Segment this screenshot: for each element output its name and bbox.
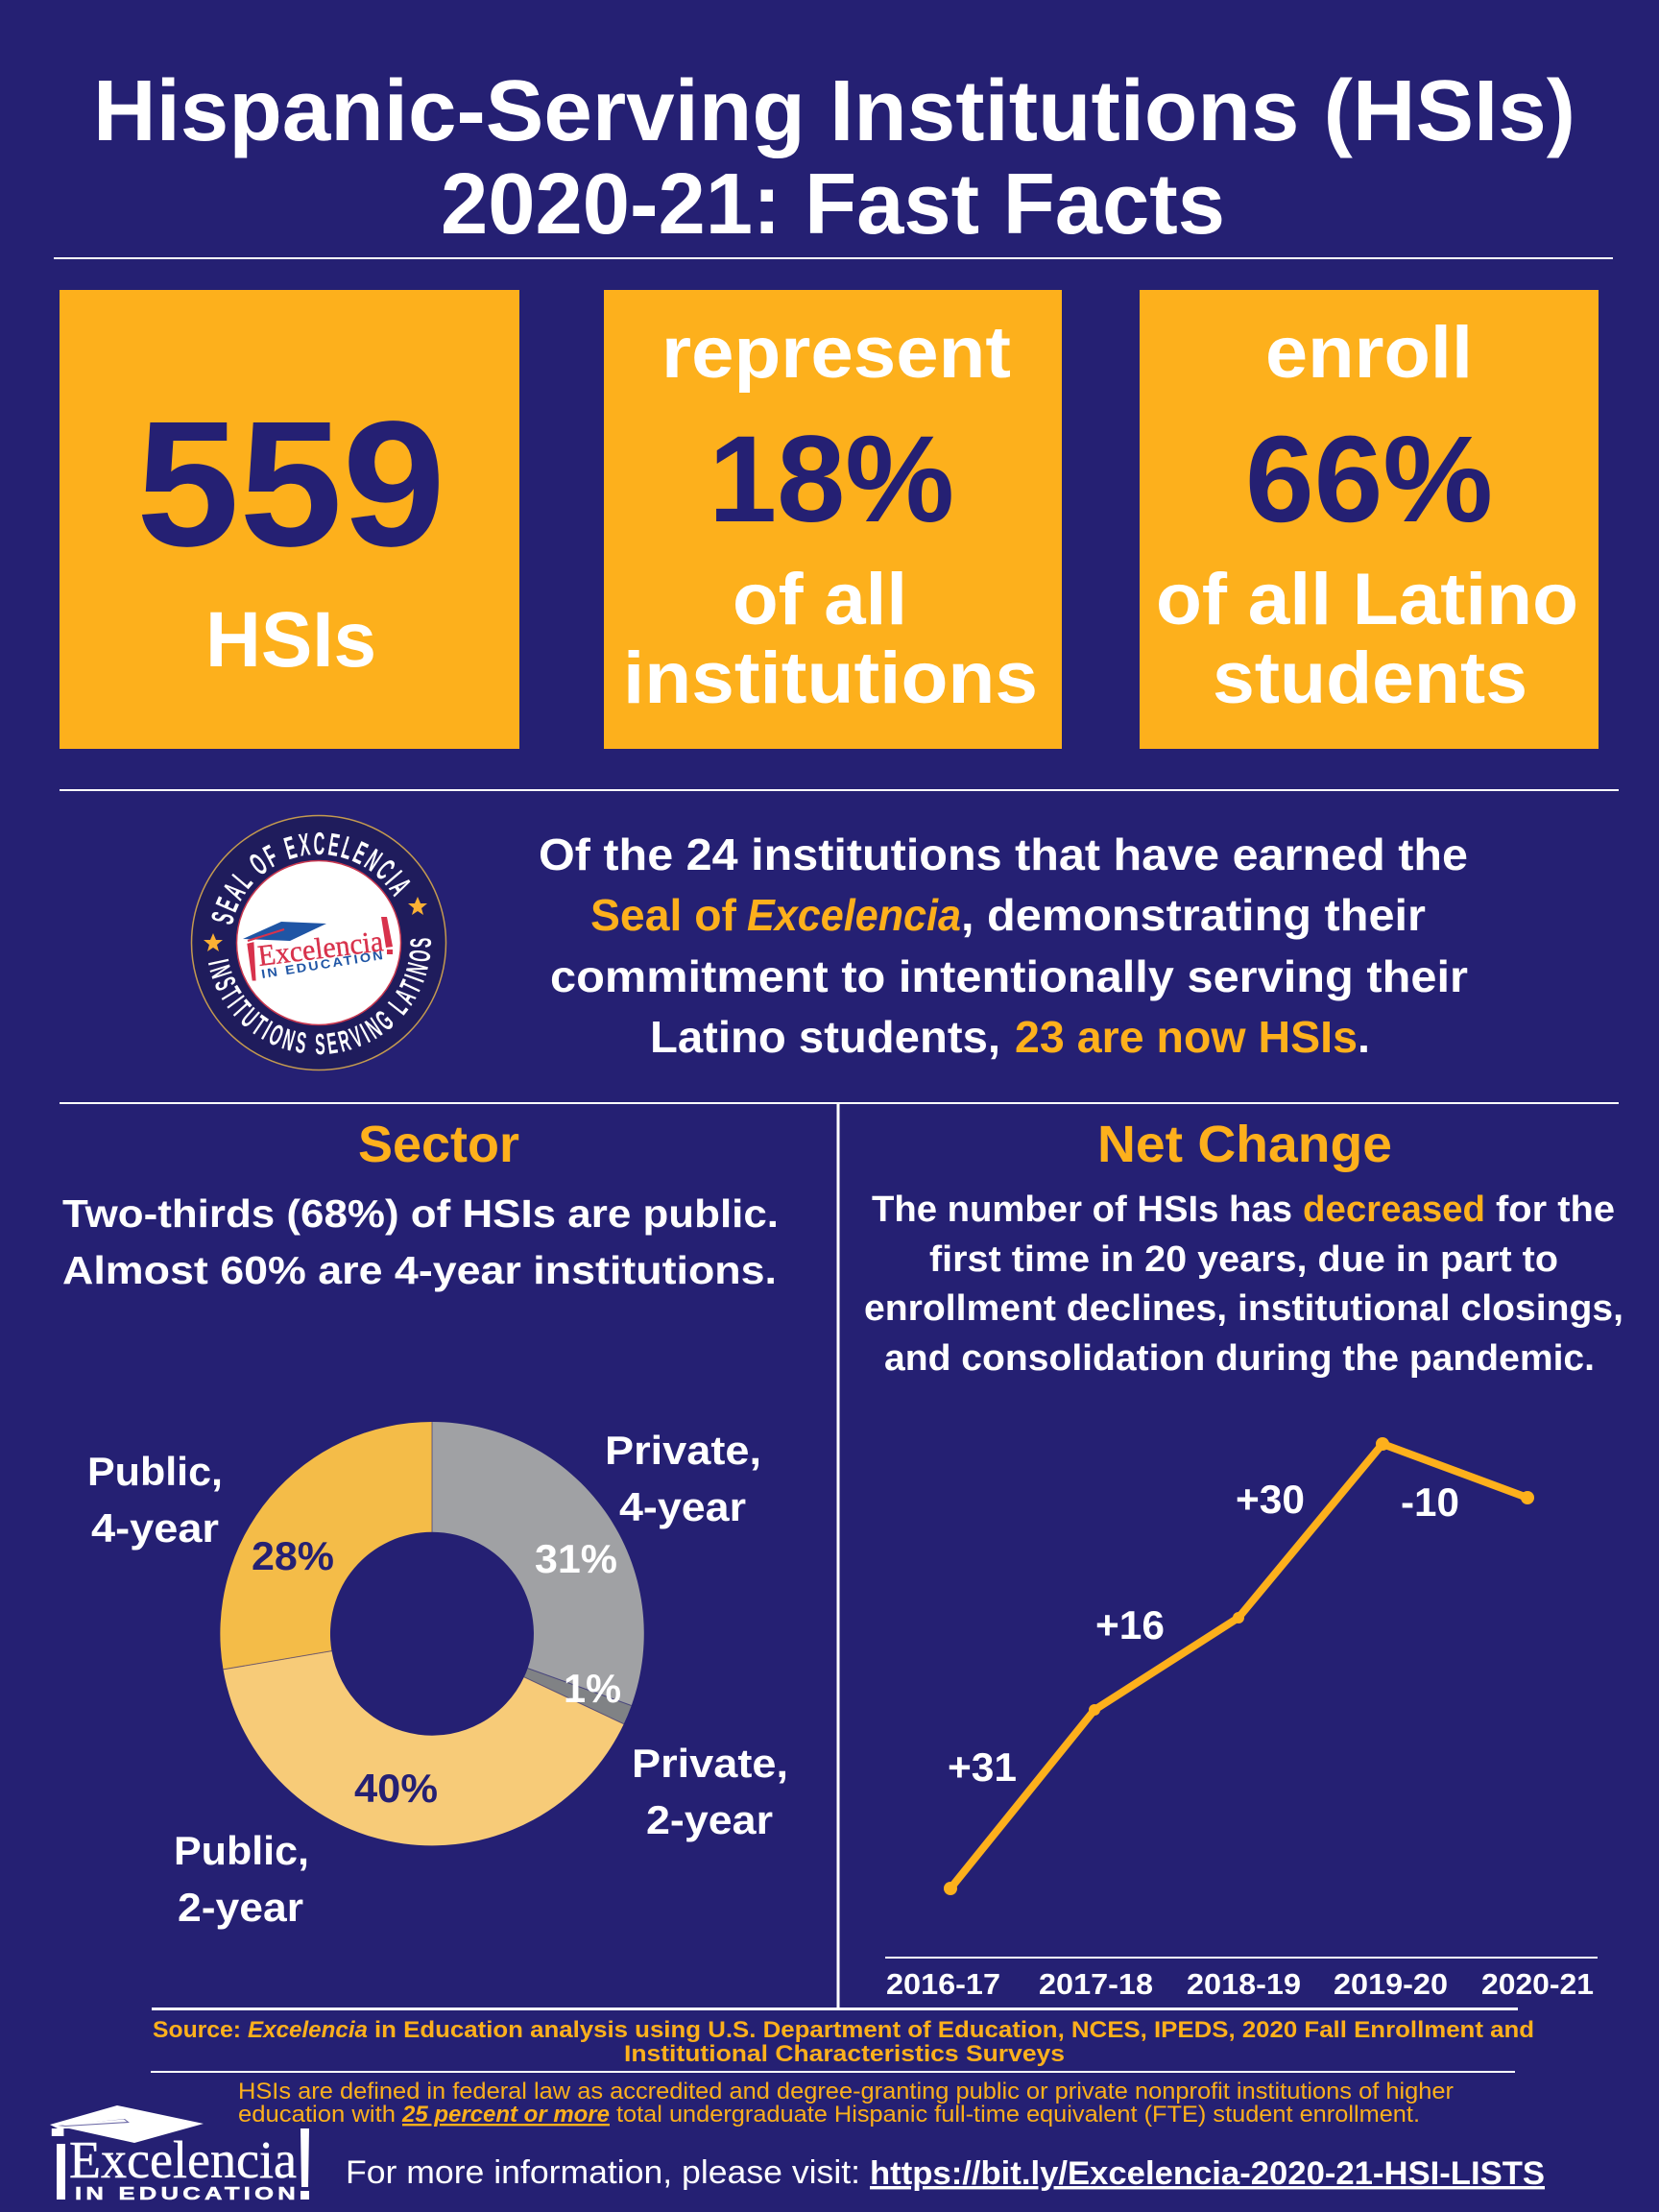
label: Private 2-year — [632, 1741, 788, 1842]
text block: net change summary: enrollment declines, institutional closings, — [864, 1288, 1623, 1329]
label: Private 4-year — [605, 1428, 761, 1529]
text block: sector summary: Two-thirds (68%) of HSIs are public. — [62, 1191, 779, 1236]
donut chart: sector shares: 40% — [354, 1766, 438, 1811]
text block: seal statement — [539, 830, 1468, 1062]
panel: enroll 66%: of all Latino — [1156, 559, 1578, 640]
text block: seal statement: 23 are now HSIs — [1015, 1012, 1358, 1062]
heading: Sector: Sector — [358, 1116, 519, 1173]
definition note — [238, 2079, 1454, 2128]
line chart: net change in HSIs: +16 — [1095, 1602, 1165, 1647]
label: Public 4-year: 4-year — [91, 1505, 219, 1551]
text block: seal statement: . — [1358, 1012, 1370, 1062]
line chart: net change in HSIs: 2018-19 — [1187, 1967, 1301, 2001]
line chart: net change in HSIs: 2016-17 — [886, 1967, 1000, 2001]
label: Public 4-year — [87, 1449, 223, 1551]
line chart: net change in HSIs: 2019-20 — [1334, 1967, 1448, 2001]
panel: enroll 66% — [1140, 290, 1599, 749]
text block: seal statement: Latino students, — [650, 1012, 1000, 1062]
text block: net change summary: The number of HSIs has — [872, 1190, 1292, 1230]
heading: Net Change: Net Change — [1097, 1116, 1392, 1173]
text block: seal statement: Of the 24 institutions that have earned the — [539, 830, 1468, 879]
label: Private 4-year: 4-year — [619, 1484, 746, 1529]
source note: Source: — [153, 2017, 241, 2043]
line chart: net change in HSIs: +31 — [948, 1744, 1017, 1790]
title: Hispanic-Serving Institutions (HSIs) — [93, 63, 1575, 159]
donut chart: sector shares: 1% — [564, 1666, 621, 1711]
text block: seal statement: commitment to intentionally serving their — [550, 951, 1468, 1001]
panel: enroll 66%: enroll — [1265, 312, 1473, 394]
text block: sector summary: Almost 60% are 4-year institutions. — [62, 1248, 777, 1292]
panel: 559 HSIs — [60, 290, 519, 749]
panel: enroll 66%: students — [1213, 637, 1527, 719]
definition note: total undergraduate Hispanic full-time equivalent (FTE) student enrollment. — [616, 2102, 1420, 2128]
panel: represent 18%: of all — [733, 559, 907, 640]
panel: 559 HSIs: 559 — [136, 385, 445, 584]
icon: Seal of Excelencia badge — [190, 814, 447, 1071]
icon: Seal of Excelencia badge: SEAL OF EXCELENCIA — [211, 831, 411, 925]
label: Private 2-year: 2-year — [646, 1797, 773, 1842]
panel: represent 18% — [604, 290, 1062, 749]
footer link text: https://bit.ly/Excelencia-2020-21-HSI-LISTS — [870, 2155, 1545, 2192]
donut chart: sector shares: 31% — [535, 1536, 617, 1581]
panel: enroll 66%: 66% — [1245, 411, 1493, 548]
icon: Excelencia in Education logo: IN EDUCATION — [75, 2184, 300, 2203]
source note — [153, 2017, 1534, 2067]
line chart: net change in HSIs: 2017-18 — [1039, 1967, 1153, 2001]
source note: Institutional Characteristics Surveys — [624, 2041, 1065, 2067]
text block: seal statement: , demonstrating their — [961, 890, 1426, 940]
icon: Excelencia in Education logo — [50, 2105, 309, 2203]
icon: Seal of Excelencia badge: Excelencia — [256, 924, 385, 973]
label: Public 4-year: Public, — [87, 1449, 223, 1494]
text block: seal statement: Seal of — [590, 890, 737, 940]
definition note: education with — [238, 2102, 396, 2128]
panel: 559 HSIs: HSIs — [205, 596, 376, 684]
definition note: 25 percent or more — [401, 2102, 610, 2128]
panel: represent 18%: institutions — [623, 637, 1038, 719]
label: Public 2-year: 2-year — [178, 1885, 303, 1930]
text block: net change summary: decreased — [1303, 1190, 1485, 1230]
label: Public 2-year: Public, — [174, 1828, 309, 1873]
line chart: net change in HSIs: -10 — [1401, 1479, 1459, 1525]
text block: sector summary — [62, 1191, 779, 1292]
text block: net change summary: for the — [1496, 1190, 1615, 1230]
source note: in Education analysis using U.S. Department of Education, NCES, IPEDS, 2020 Fall Enrollment and — [374, 2017, 1534, 2043]
text block: net change summary: first time in 20 years, due in part to — [929, 1239, 1558, 1280]
label: Private 4-year: Private, — [605, 1428, 761, 1473]
icon: Seal of Excelencia badge: IN EDUCATION — [260, 948, 386, 981]
donut chart: sector shares — [220, 1422, 644, 1845]
icon: Excelencia in Education logo: Excelencia — [69, 2130, 297, 2189]
label: Private 2-year: Private, — [632, 1741, 788, 1786]
source note: Excelencia — [248, 2017, 368, 2043]
line chart: net change in HSIs: 2020-21 — [1481, 1967, 1594, 2001]
donut chart: sector shares: 28% — [252, 1533, 334, 1578]
line chart: net change in HSIs: +30 — [1236, 1477, 1305, 1522]
text block: net change summary — [864, 1190, 1623, 1379]
title — [93, 63, 1575, 252]
panel: represent 18%: 18% — [709, 411, 954, 548]
text block: seal statement: Excelencia — [747, 890, 961, 940]
footer link text — [346, 2154, 1545, 2192]
title: 2020-21: Fast Facts — [441, 156, 1225, 252]
panel: represent 18%: represent — [661, 312, 1011, 394]
icon: Seal of Excelencia badge: INSTITUTIONS SERVING LATINOS — [208, 938, 432, 1054]
definition note: HSIs are defined in federal law as accredited and degree-granting public or private nonprofit institutions of higher — [238, 2079, 1454, 2104]
footer link text: For more information, please visit: — [346, 2154, 860, 2191]
label: Public 2-year — [174, 1828, 309, 1930]
line chart: net change in HSIs — [885, 1437, 1598, 2001]
text block: net change summary: and consolidation during the pandemic. — [884, 1338, 1595, 1379]
